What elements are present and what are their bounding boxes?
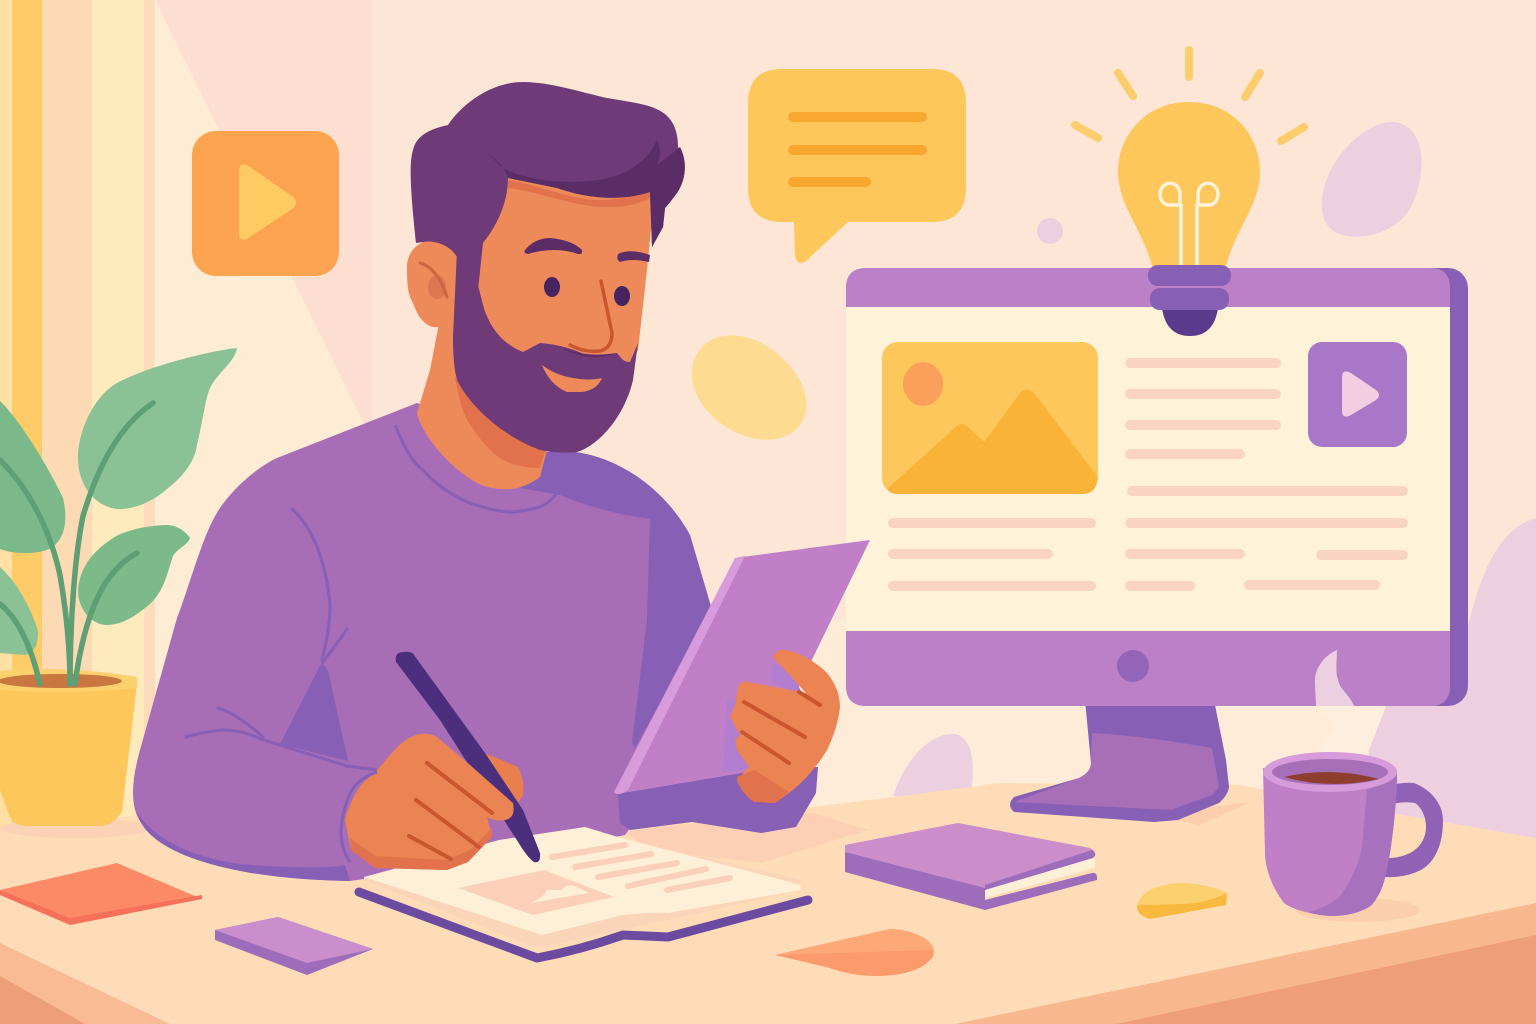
man <box>133 82 870 958</box>
steam <box>1315 650 1386 753</box>
left hand <box>341 734 514 870</box>
hair shade <box>478 140 685 247</box>
eyes <box>544 277 560 297</box>
notebook <box>359 827 808 958</box>
nose <box>570 281 612 351</box>
icon: light bulb <box>1075 50 1304 336</box>
filament <box>1160 183 1218 266</box>
notebook image <box>458 870 614 915</box>
neck shadow <box>455 377 547 468</box>
plant <box>0 348 237 826</box>
ear <box>407 242 457 328</box>
image card <box>882 342 1098 494</box>
face <box>465 170 652 380</box>
stems <box>0 403 153 684</box>
sweater bottom shade <box>137 812 350 881</box>
icon: video play tile <box>192 131 339 276</box>
neck <box>417 318 547 489</box>
decorative blob: small lilac dot <box>1037 218 1063 244</box>
sweater body <box>133 403 720 881</box>
tablet <box>614 540 870 794</box>
thumb of writing hand <box>480 752 523 815</box>
desk item: yellow pebble <box>1137 883 1227 919</box>
pot <box>0 669 137 826</box>
rays <box>1075 50 1304 141</box>
coffee <box>1284 772 1379 784</box>
inner arm shade <box>280 662 348 761</box>
power button <box>1117 650 1149 682</box>
video tile <box>1308 342 1407 447</box>
desk shadows <box>620 813 868 863</box>
sleeve lines <box>186 509 377 770</box>
decorative blob: lilac top right <box>1322 122 1422 237</box>
text lines <box>888 358 1408 591</box>
hair <box>411 82 685 300</box>
icon: speech bubble <box>748 69 966 263</box>
desk item: orange shape <box>775 929 934 976</box>
collar line <box>395 425 565 512</box>
forehead shade <box>508 180 651 207</box>
notebook lines <box>552 845 730 890</box>
sweater right shoulder shade <box>520 451 712 748</box>
computer monitor <box>846 268 1468 822</box>
moustache shadow <box>560 347 617 357</box>
book <box>845 823 1097 910</box>
decorative blob: lilac right wall <box>1362 518 1536 850</box>
decorative blob: lilac near desk <box>893 734 973 800</box>
monitor stand <box>1010 700 1229 822</box>
decorative blob: yellow <box>692 335 806 440</box>
pen <box>396 652 540 862</box>
coffee mug <box>1263 650 1443 916</box>
leaves <box>78 348 237 509</box>
beard <box>453 250 638 453</box>
monitor screen <box>846 307 1450 631</box>
desk item: purple card <box>215 917 373 975</box>
mug handle <box>1385 783 1443 877</box>
desk <box>0 783 1536 1024</box>
monitor frame <box>846 268 1468 706</box>
eyebrows <box>524 238 650 262</box>
bulb base <box>1162 308 1218 336</box>
mouth <box>542 365 602 392</box>
right hand <box>730 650 840 803</box>
right forearm cuff <box>618 767 818 833</box>
bulb glass <box>1118 102 1260 266</box>
desk item: coral pad <box>0 863 202 925</box>
